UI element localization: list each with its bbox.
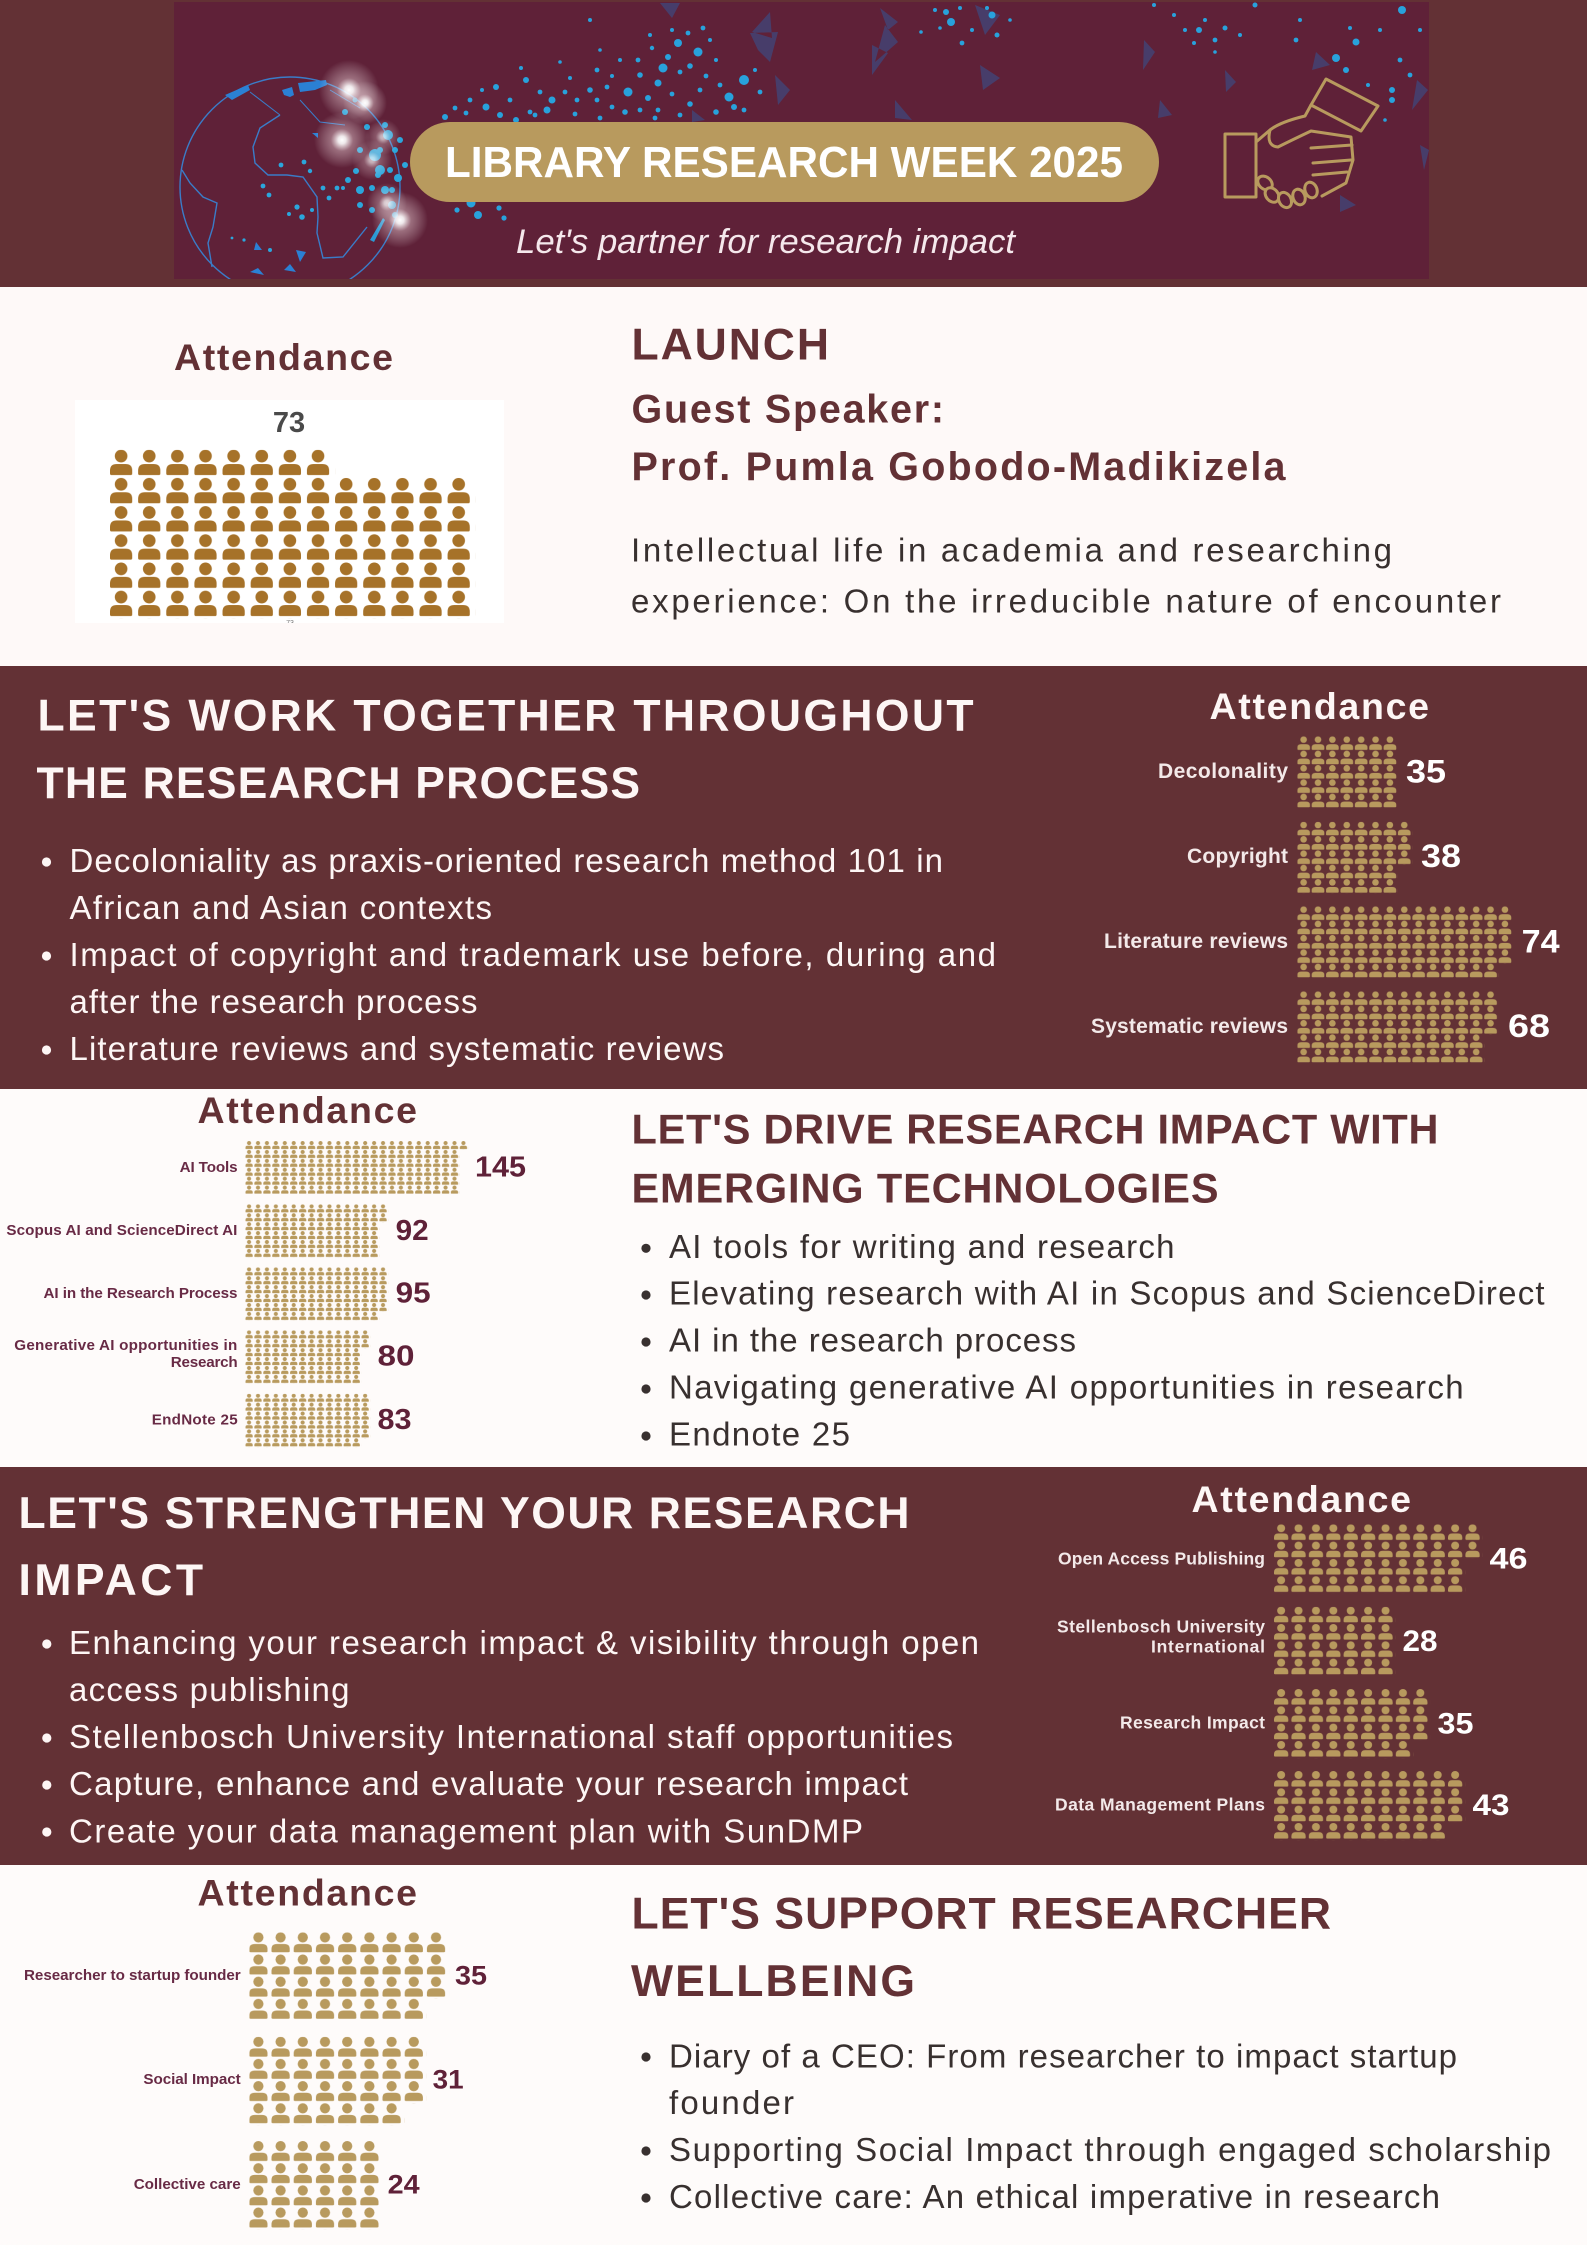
bullet list: AI tools for writing and research — [669, 1228, 1174, 1265]
bullet list: Decoloniality as praxis-oriented research method 101 in — [70, 842, 943, 879]
chart: Scopus AI and ScienceDirect AI — [6, 1204, 429, 1258]
panel: strengthen impact — [0, 1467, 1587, 1865]
chart: researcher to startup founder: Researcher to startup founder — [24, 1967, 241, 1984]
pictogram: launch attendance 73: 73 — [286, 620, 294, 627]
chart: AI in the research process: 95 — [396, 1278, 431, 1310]
chart: generative AI: Generative AI opportunities in — [14, 1337, 237, 1354]
talk title: experience: On the irreducible nature of encounter — [631, 582, 1501, 619]
chart: copyright: 38 — [1421, 838, 1461, 874]
chart: literature reviews: Literature reviews — [1104, 930, 1288, 953]
chart: decolonality: Decolonality — [1158, 760, 1288, 783]
chart: AI tools: 145 — [475, 1152, 526, 1184]
chart: data management plans — [1055, 1771, 1510, 1840]
bullet list — [641, 2037, 1551, 2215]
chart: collective care — [134, 2141, 420, 2230]
title pill — [410, 122, 1159, 202]
title pill: LIBRARY RESEARCH WEEK 2025 — [445, 138, 1123, 187]
heading — [36, 692, 974, 808]
chart: EndNote 25 — [152, 1394, 411, 1447]
guest speaker: Guest Speaker: — [632, 388, 944, 432]
chart: Stellenbosch University International: 28 — [1402, 1625, 1438, 1658]
chart: research impact: Research Impact — [1120, 1712, 1265, 1732]
chart: data management plans: 43 — [1472, 1789, 1510, 1822]
heading: THE RESEARCH PROCESS — [36, 759, 640, 808]
chart: systematic reviews: Systematic reviews — [1091, 1015, 1288, 1038]
guest speaker: Prof. Pumla Gobodo-Madikizela — [632, 445, 1287, 489]
heading: LET'S DRIVE RESEARCH IMPACT WITH — [632, 1106, 1438, 1152]
chart: copyright — [1187, 822, 1461, 893]
heading: LET'S STRENGTHEN YOUR RESEARCH — [18, 1489, 910, 1538]
chart: copyright: Copyright — [1187, 845, 1288, 868]
heading — [631, 1890, 1331, 2006]
chart: AI tools — [180, 1141, 526, 1194]
chart: generative AI: Research — [171, 1354, 238, 1371]
bullet list: Enhancing your research impact & visibility through open — [69, 1624, 979, 1661]
chart: Stellenbosch University International — [1057, 1607, 1438, 1676]
panel: emerging technologies — [0, 1089, 1587, 1467]
chart: research impact: 35 — [1438, 1707, 1474, 1740]
bullet list — [42, 842, 996, 1067]
bullet list: Diary of a CEO: From researcher to impact startup — [669, 2037, 1457, 2074]
chart: researcher to startup founder: 35 — [455, 1960, 487, 1990]
panel: work together — [0, 666, 1587, 1089]
chart: AI in the research process: AI in the Research Process — [44, 1285, 238, 1302]
heading — [18, 1489, 910, 1605]
pictogram: launch attendance 73 — [110, 412, 476, 623]
attendance heading: Attendance — [174, 336, 393, 378]
tagline: Let's partner for research impact — [516, 223, 1017, 261]
icon: globe with particles — [180, 60, 428, 297]
chart: EndNote 25: 83 — [378, 1404, 412, 1436]
bullet list — [641, 1228, 1545, 1453]
bullet list: Elevating research with AI in Scopus and ScienceDirect — [669, 1275, 1545, 1312]
talk title: Intellectual life in academia and researching — [631, 532, 1392, 569]
panel: researcher wellbeing — [0, 1865, 1587, 2245]
chart: literature reviews: 74 — [1522, 924, 1560, 960]
chart: systematic reviews: 68 — [1508, 1008, 1550, 1044]
bullet list: Capture, enhance and evaluate your research impact — [69, 1765, 908, 1802]
heading: launch: LAUNCH — [632, 320, 829, 370]
chart: systematic reviews — [1091, 991, 1550, 1063]
decoration: triangles and dots — [442, 2, 1429, 221]
heading: LET'S WORK TOGETHER THROUGHOUT — [38, 692, 974, 741]
heading — [632, 1106, 1438, 1212]
chart: social impact — [143, 2037, 464, 2125]
chart: generative AI — [14, 1330, 415, 1384]
heading: IMPACT — [18, 1556, 203, 1605]
talk title — [631, 532, 1501, 619]
chart: open access publishing: Open Access Publishing — [1058, 1548, 1265, 1568]
chart: AI tools: AI Tools — [180, 1159, 238, 1176]
pictogram: launch attendance 73: 73 — [273, 407, 305, 439]
chart: Scopus AI and ScienceDirect AI: 92 — [396, 1215, 429, 1247]
heading: WELLBEING — [631, 1957, 915, 2006]
chart: collective care: 24 — [388, 2169, 420, 2199]
chart: Stellenbosch University International: International — [1151, 1636, 1265, 1656]
chart: generative AI: 80 — [378, 1341, 414, 1373]
bullet list: AI in the research process — [669, 1322, 1076, 1359]
panel: launch — [75, 320, 1501, 627]
heading: EMERGING TECHNOLOGIES — [632, 1164, 1218, 1212]
heading: LET'S SUPPORT RESEARCHER — [632, 1890, 1331, 1938]
chart: data management plans: Data Management Plans — [1055, 1794, 1265, 1814]
bullet list: Impact of copyright and trademark use before, during and — [70, 936, 996, 973]
bullet list: Literature reviews and systematic reviews — [70, 1030, 724, 1067]
chart: open access publishing: 46 — [1490, 1542, 1528, 1575]
chart: researcher to startup founder — [24, 1932, 487, 2021]
chart: EndNote 25: EndNote 25 — [152, 1412, 238, 1429]
chart: social impact: Social Impact — [143, 2071, 241, 2088]
chart: social impact: 31 — [433, 2065, 464, 2095]
bullet list: after the research process — [70, 983, 478, 1020]
guest speaker — [632, 388, 1287, 489]
chart: research impact — [1120, 1689, 1474, 1758]
chart: collective care: Collective care — [134, 2176, 241, 2193]
panel: header banner — [0, 0, 1587, 297]
attendance heading: Attendance — [198, 1089, 417, 1131]
icon: handshake — [1225, 79, 1378, 210]
bullet list: Supporting Social Impact through engaged scholarship — [669, 2131, 1551, 2168]
attendance heading: Attendance — [1210, 685, 1429, 727]
chart: decolonality: 35 — [1406, 754, 1446, 790]
bullet list: Collective care: An ethical imperative in research — [669, 2178, 1440, 2215]
bullet list: Stellenbosch University International staff opportunities — [69, 1718, 953, 1755]
chart: AI in the research process — [44, 1267, 431, 1321]
bullet list — [42, 1624, 979, 1849]
bullet list: Endnote 25 — [669, 1416, 850, 1453]
bullet list: founder — [669, 2084, 794, 2121]
bullet list: Create your data management plan with SunDMP — [69, 1812, 863, 1849]
chart: Scopus AI and ScienceDirect AI: Scopus AI and ScienceDirect AI — [6, 1222, 237, 1239]
chart: decolonality — [1158, 736, 1446, 808]
bullet list: Navigating generative AI opportunities in research — [669, 1369, 1464, 1406]
bullet list: African and Asian contexts — [70, 889, 492, 926]
attendance heading: Attendance — [1192, 1478, 1411, 1520]
chart: Stellenbosch University International: Stellenbosch University — [1057, 1616, 1265, 1636]
bullet list: access publishing — [69, 1671, 350, 1708]
chart: open access publishing — [1058, 1524, 1528, 1594]
chart: literature reviews — [1104, 906, 1560, 978]
attendance heading: Attendance — [198, 1872, 417, 1914]
